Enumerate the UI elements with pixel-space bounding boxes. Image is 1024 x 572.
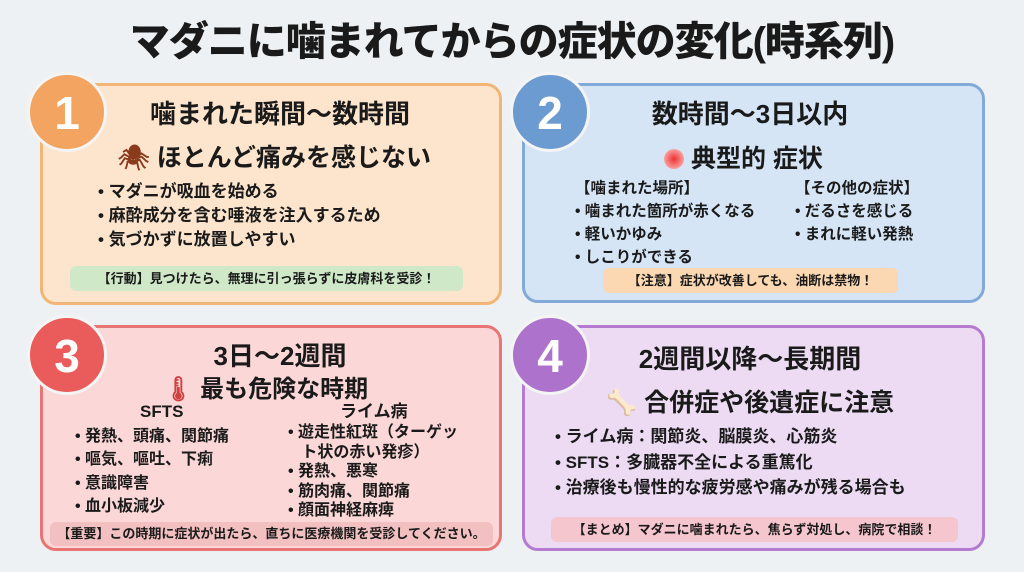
panel: 2 [522,83,985,303]
bullets 4: • ライム病：関節炎、脳膜炎、心筋炎 [555,427,837,446]
bullets 1: • 麻酔成分を含む唾液を注入するため [98,206,381,225]
column: bite site: • 軽いかゆみ [575,226,662,243]
heading 3: 3日～2週間 [214,341,346,371]
panel: 1 [40,83,502,305]
column: SFTS: • 意識障害 [75,474,149,492]
column: SFTS: • 発熱、頭痛、関節痛 [75,428,229,444]
badge 1: 1 [54,87,80,139]
badge 2: 2 [537,87,563,139]
subheading 1 with tick icon: 🕷 ほとんど痛みを感じない [118,144,431,172]
column: other symptoms: 【その他の症状】 [795,180,919,197]
column: Lyme disease: • 発熱、悪寒 [288,463,378,480]
column: Lyme disease: ト状の赤い発疹） [301,444,429,460]
column: SFTS: • 血小板減少 [75,498,165,515]
badge 4 [510,315,590,395]
badge 1 [27,72,107,152]
panel: 3 [40,325,502,551]
column: bite site [575,180,755,266]
badge 4: 4 [537,330,563,382]
column: bite site: • 噛まれた箇所が赤くなる [575,203,755,220]
column: Lyme disease: • 顔面神経麻痺 [288,502,394,519]
summary box 4 [551,517,958,542]
column: other symptoms: • だるさを感じる [795,203,913,220]
caution box 2 [603,268,898,293]
bullets 1: • マダニが吸血を始める [98,182,279,201]
title: マダニに噛まれてからの症状の変化(時系列) [130,20,894,64]
column: Lyme disease [288,402,458,519]
action box 1: 【行動】見つけたら、無理に引っ張らずに皮膚科を受診！ [98,271,435,286]
column: SFTS [75,402,229,515]
summary box 4: 【まとめ】マダニに噛まれたら、焦らず対処し、病院で相談！ [573,522,936,537]
column: bite site: 【噛まれた場所】 [575,180,699,197]
subheading 4 with joint icon: 🦴 合併症や後遺症に注意 [606,389,894,417]
column: SFTS: SFTS [140,402,183,421]
column: Lyme disease: • 筋肉痛、関節痛 [288,482,410,500]
column: other symptoms: • まれに軽い発熱 [795,226,913,243]
bullets 1 [98,182,381,249]
column: Lyme disease: ライム病 [340,402,408,421]
column: SFTS: • 嘔気、嘔吐、下痢 [75,451,213,468]
badge 3: 3 [54,330,80,382]
panel: 4 [522,325,985,551]
bullets 1: • 気づかずに放置しやすい [98,230,296,249]
heading 4: 2週間以降～長期間 [639,344,861,374]
column: Lyme disease: • 遊走性紅斑（ターゲッ [288,424,458,441]
bullets 4: • 治療後も慢性的な疲労感や痛みが残る場合も [555,478,906,497]
bullets 4: • SFTS：多臓器不全による重篤化 [555,452,813,472]
action box 1 [70,266,463,291]
important box 3: 【重要】この時期に症状が出たら、直ちに医療機関を受診してください。 [57,526,486,541]
subheading 2 with red spot icon: 典型的 症状 [691,145,823,173]
badge 2 [510,72,590,152]
important box 3 [50,522,493,546]
column: bite site: • しこりができる [575,249,693,266]
caution box 2: 【注意】症状が改善しても、油断は禁物！ [628,273,873,288]
column: other symptoms [795,180,919,243]
badge 3 [27,315,107,395]
subheading 3 with thermometer icon: 🌡 最も危険な時期 [163,376,368,403]
heading 2: 数時間～3日以内 [652,99,848,129]
bullets 4 [555,427,906,497]
heading 1: 噛まれた瞬間～数時間 [150,99,410,129]
